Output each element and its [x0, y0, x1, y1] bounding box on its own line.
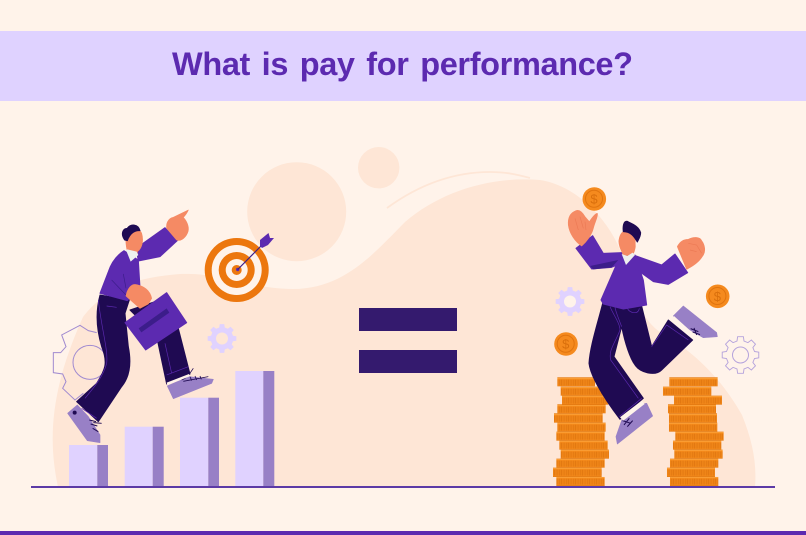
right arm [633, 254, 688, 284]
hair [122, 225, 140, 241]
coin top: $ [590, 192, 598, 206]
back leg [130, 300, 190, 384]
ground line [31, 486, 775, 488]
raised arm [136, 228, 177, 261]
back shoe [167, 377, 213, 399]
bent arm [110, 263, 135, 297]
person jumping with joy [568, 210, 717, 444]
icon: filled gear right [556, 287, 584, 316]
torso [601, 254, 647, 309]
title banner [0, 31, 806, 101]
left arm [576, 236, 622, 269]
briefcase [125, 293, 187, 350]
rising bar chart steps [69, 371, 274, 486]
trailing cuff [672, 316, 695, 339]
icon: outlined gear right [722, 337, 759, 373]
icon: target with dart [205, 233, 274, 302]
lower shoe [616, 403, 653, 444]
pointing hand [167, 210, 188, 240]
coin right [706, 284, 730, 308]
collar [622, 253, 635, 265]
torso [100, 251, 140, 301]
front shoe [68, 405, 100, 443]
hand on briefcase [126, 284, 152, 308]
coin stack left [553, 377, 609, 486]
raised trailing shoe [673, 306, 717, 338]
coin stack right [663, 377, 724, 486]
coin left: $ [562, 336, 570, 352]
right hand [677, 237, 705, 269]
lower cuff [620, 401, 645, 421]
hair [623, 221, 641, 242]
coin left [554, 332, 578, 356]
coin top [582, 187, 606, 211]
icon: outlined gear left [53, 325, 107, 400]
small background circle [358, 147, 399, 188]
big background circle [247, 162, 346, 261]
background blob [53, 179, 755, 487]
trousers [589, 303, 693, 419]
left hand [568, 210, 598, 246]
back trouser cuff [167, 374, 190, 385]
equals sign [359, 308, 457, 373]
head [619, 231, 635, 256]
icon: filled gear left [208, 324, 236, 353]
bottom bar [0, 531, 806, 535]
title: What is pay for performance? [172, 46, 633, 82]
head [126, 230, 143, 255]
collar [126, 249, 138, 262]
person climbing with briefcase [68, 210, 213, 443]
coin right: $ [714, 289, 722, 304]
front leg [77, 295, 130, 422]
thin decorative curve [387, 172, 530, 208]
